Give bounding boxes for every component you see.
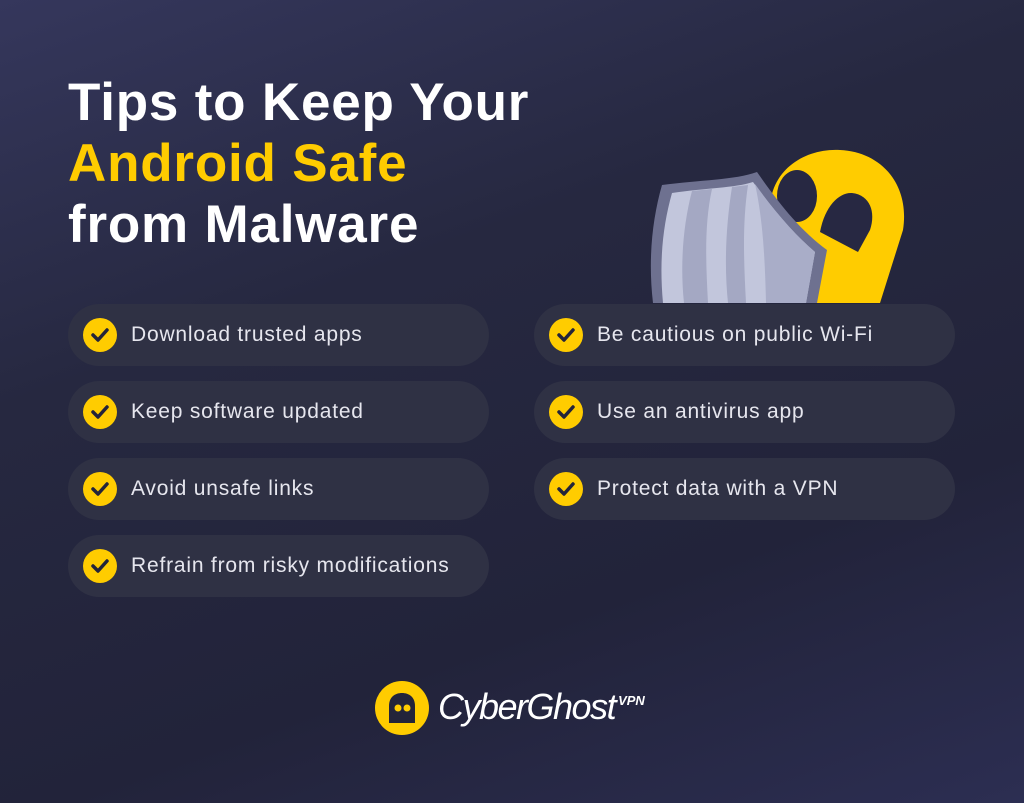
tip: avoid unsafe links — [68, 458, 489, 520]
illustration: shield and ghost — [650, 150, 904, 303]
tip: antivirus: Use an antivirus app — [597, 400, 804, 423]
tip: public wifi: Be cautious on public Wi-Fi — [597, 323, 873, 346]
tip: keep software updated — [68, 381, 489, 443]
title — [68, 73, 529, 254]
title: from Malware — [68, 195, 419, 254]
tip: antivirus — [534, 381, 955, 443]
tip: keep software updated: Keep software updated — [131, 400, 364, 423]
tip: download trusted apps: Download trusted apps — [131, 323, 363, 346]
tip: vpn — [534, 458, 955, 520]
tip: refrain from risky modifications — [68, 535, 489, 597]
tip: avoid unsafe links: Avoid unsafe links — [131, 477, 314, 500]
tip: public wifi — [534, 304, 955, 366]
tip: refrain from risky modifications: Refrain from risky modifications — [131, 554, 450, 577]
logo text: CyberGhostVPN — [438, 686, 645, 727]
icon: ghost logo — [375, 681, 429, 735]
tip: vpn: Protect data with a VPN — [597, 477, 838, 500]
tip: download trusted apps — [68, 304, 489, 366]
logo — [375, 681, 645, 735]
title: Android Safe — [68, 134, 407, 193]
title: Tips to Keep Your — [68, 73, 529, 132]
